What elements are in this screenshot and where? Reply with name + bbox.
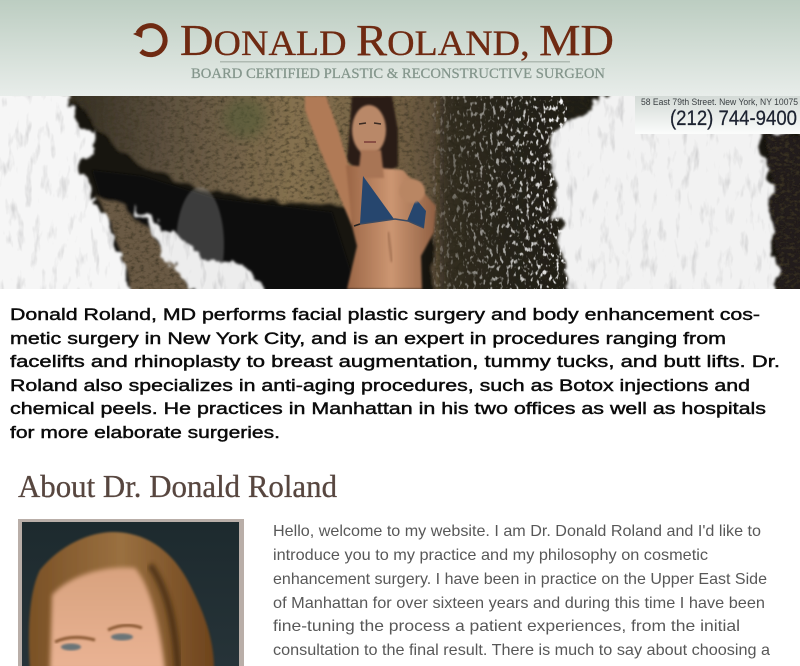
- brows: [55, 625, 142, 642]
- left water: [0, 90, 132, 300]
- abdomen shadow: [388, 232, 392, 262]
- face: [352, 105, 386, 155]
- hair shadow strand: [150, 565, 178, 666]
- rock green patch: [223, 98, 267, 138]
- intro paragraph: metic surgery in New York City, and is an expert in procedures ranging from: [10, 329, 726, 348]
- rock right dark shade: [434, 96, 598, 289]
- rock: [68, 96, 598, 289]
- header banner: [0, 0, 800, 96]
- lower left rock: [94, 194, 190, 289]
- intro paragraph: [10, 305, 780, 442]
- right dark rock: [765, 134, 800, 300]
- intro paragraph: Roland also specializes in anti-aging procedures, such as Botox injections and: [10, 376, 750, 395]
- contact panel: [635, 96, 800, 134]
- face: [50, 567, 165, 666]
- logo name: DONALD ROLAND, MD: [180, 16, 614, 65]
- right water: [548, 90, 800, 300]
- about paragraph: fine-tuning the process a patient experiences, from the initial: [273, 618, 740, 635]
- intro paragraph: Donald Roland, MD performs facial plastic surgery and body enhancement cos-: [10, 305, 760, 324]
- portrait photo: [18, 519, 244, 666]
- torso: [346, 165, 436, 289]
- intro paragraph: chemical peels. He practices in Manhattan in his two offices as well as hospitals: [10, 399, 766, 418]
- raised arm: [304, 96, 353, 226]
- neck: [358, 150, 384, 178]
- hero photo: waterfall: [0, 90, 800, 303]
- intro paragraph: facelifts and rhinoplasty to breast augmentation, tummy tucks, and butt lifts. Dr.: [10, 352, 780, 371]
- about paragraph: consultation to the final result. There is much to say about choosing a: [273, 642, 770, 659]
- spray column in cave: [176, 187, 224, 303]
- about paragraph: introduce you to my practice and my philosophy on cosmetic: [273, 547, 708, 564]
- logo tagline: BOARD CERTIFIED PLASTIC & RECONSTRUCTIVE SURGEON: [191, 66, 605, 82]
- eyes: [61, 644, 81, 650]
- woman: [305, 96, 436, 289]
- about paragraph: enhancement surgery. I have been in practice on the Upper East Side: [273, 571, 767, 588]
- section heading: About Dr. Donald Roland: [18, 468, 337, 504]
- dark cave: [92, 170, 350, 289]
- about paragraph: [273, 523, 770, 659]
- icon: logo ring: [133, 26, 165, 55]
- spray right: [432, 96, 567, 289]
- foam: [132, 204, 266, 289]
- hair: [29, 532, 214, 666]
- intro paragraph: for more elaborate surgeries.: [10, 423, 280, 442]
- hair: [347, 96, 398, 172]
- about paragraph: Hello, welcome to my website. I am Dr. Donald Roland and I'd like to: [273, 523, 761, 540]
- bikini: [360, 176, 394, 224]
- about paragraph: of Manhattan for over sixteen years and during this time I have been: [273, 595, 765, 612]
- hand: [410, 178, 426, 204]
